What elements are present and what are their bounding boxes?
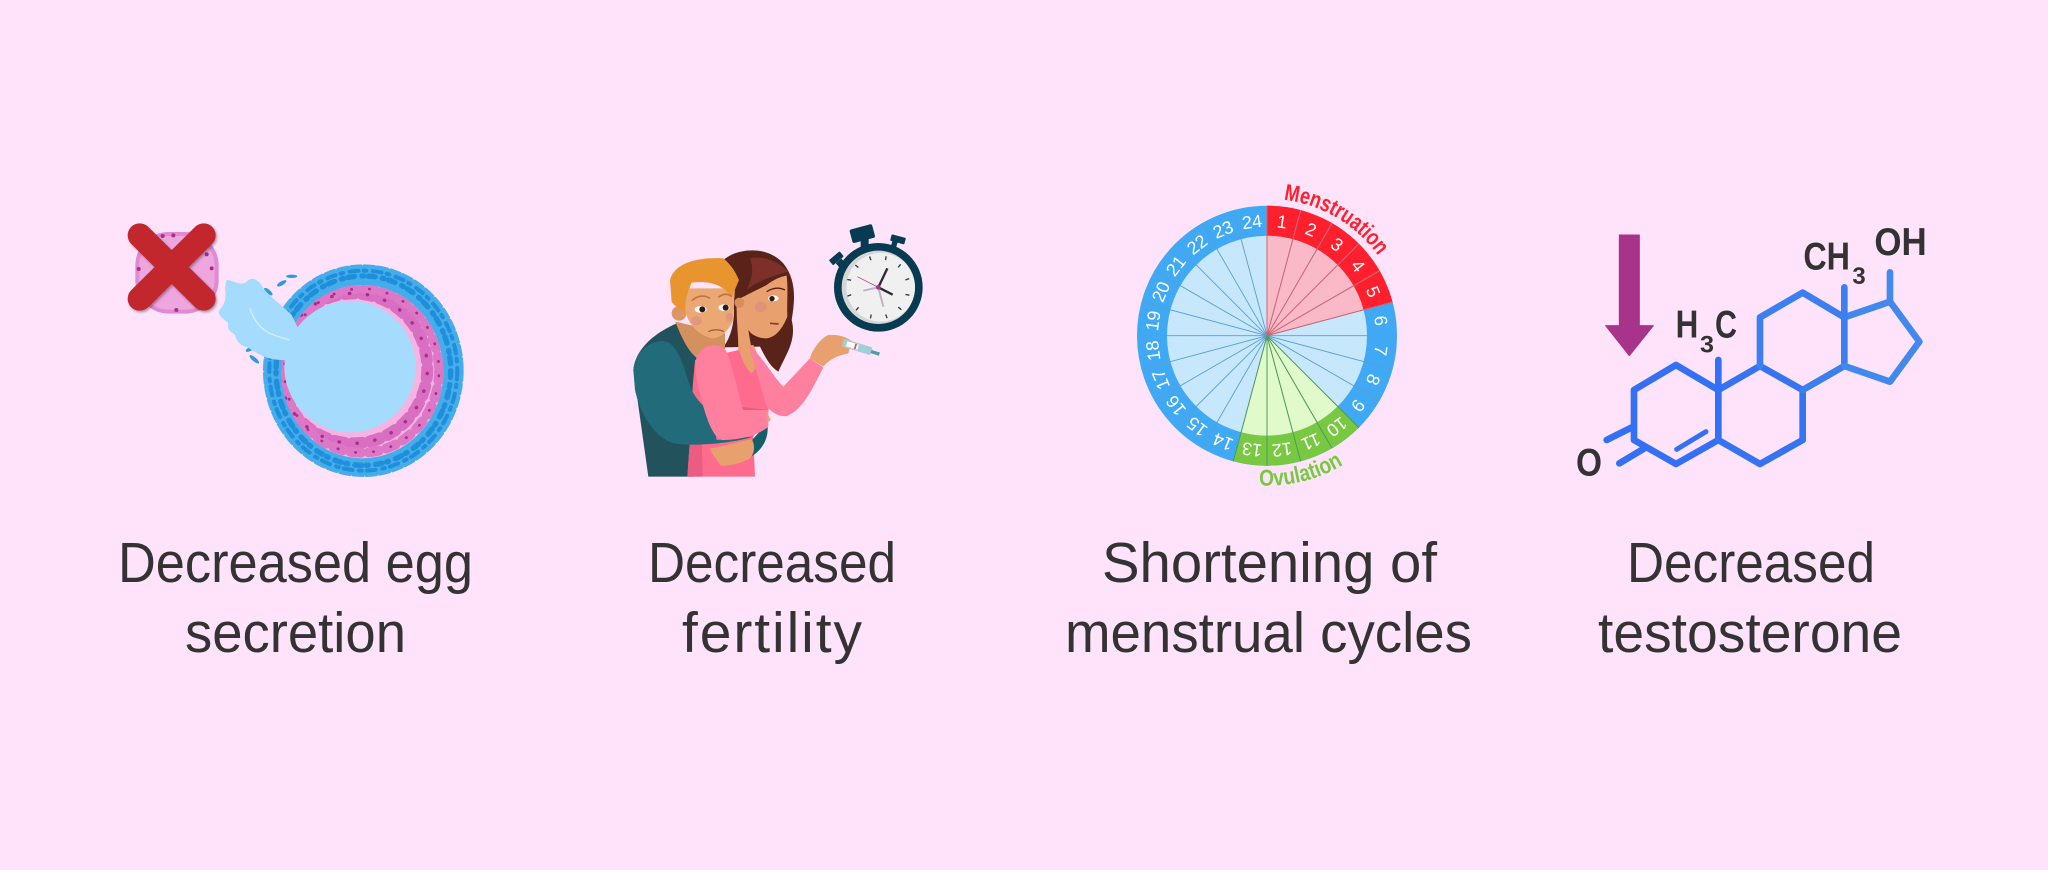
woman dress — [687, 345, 769, 477]
label: menstruation: Menstruation — [1284, 184, 1386, 255]
day numbers: 2 — [1302, 219, 1319, 241]
molecule labels: 3 — [1700, 331, 1714, 358]
day numbers: 3 — [1327, 234, 1347, 256]
molecule labels: OH — [1874, 221, 1927, 264]
molecule labels: 3 — [1852, 263, 1866, 290]
text: decreased fertility: fertility — [682, 601, 862, 665]
text: decreased egg secretion — [118, 531, 473, 665]
molecule bonds — [1607, 272, 1919, 464]
day numbers: 7 — [1370, 344, 1391, 357]
day numbers: 21 — [1162, 252, 1190, 280]
day numbers: 9 — [1347, 395, 1369, 416]
pregnancy test — [842, 339, 881, 358]
hands — [710, 335, 852, 466]
day numbers: 15 — [1183, 413, 1211, 441]
text: decreased testosterone — [1598, 531, 1902, 665]
stopwatch — [829, 224, 923, 332]
day numbers: 10 — [1323, 413, 1351, 441]
woman face and neck — [734, 258, 788, 350]
day numbers: 4 — [1347, 256, 1369, 276]
text: shortening of menstrual cycles: menstrual cycles — [1065, 601, 1472, 665]
molecule labels: O — [1576, 442, 1602, 485]
day numbers: 18 — [1142, 339, 1165, 362]
wheel base — [1167, 236, 1367, 436]
infographic canvas — [122, 184, 1924, 664]
text: shortening of menstrual cycles — [1065, 531, 1472, 665]
text: shortening of menstrual cycles: Shortening of — [1102, 531, 1437, 595]
day numbers: 22 — [1183, 231, 1211, 259]
day numbers: 12 — [1271, 438, 1293, 461]
woman extended arm — [748, 345, 823, 416]
day numbers: 11 — [1298, 429, 1323, 454]
follicle antrum and released fluid — [219, 279, 416, 432]
day numbers: 1 — [1276, 211, 1288, 233]
menstruation segment — [1267, 206, 1393, 336]
icon: worried couple with pregnancy test and stopwatch — [633, 224, 923, 477]
day numbers: 17 — [1148, 367, 1174, 393]
chart: menstrual cycle wheel — [1137, 184, 1397, 486]
day numbers: 13 — [1241, 438, 1263, 461]
day numbers: 24 — [1241, 211, 1263, 233]
woman near sleeve — [696, 345, 768, 440]
label: ovulation: Ovulation — [1260, 456, 1342, 486]
day numbers: 6 — [1370, 314, 1391, 327]
molecule labels: CH — [1803, 235, 1850, 278]
follicle outer blue layer — [245, 266, 462, 475]
text: decreased testosterone: testosterone — [1598, 601, 1902, 665]
text: decreased fertility: Decreased — [648, 531, 896, 595]
icon: ruptured follicle and crossed-out egg — [137, 233, 462, 475]
text: decreased testosterone: Decreased — [1627, 531, 1875, 595]
day numbers: 16 — [1162, 391, 1190, 420]
day numbers: 14 — [1210, 429, 1236, 455]
day numbers: 5 — [1362, 283, 1384, 300]
text: decreased fertility — [648, 531, 896, 665]
day numbers: 19 — [1142, 309, 1165, 332]
man head — [670, 258, 739, 338]
arrow: decrease — [1606, 235, 1653, 356]
man torso — [633, 322, 725, 477]
follicle pink granulosa layer — [279, 285, 443, 458]
day numbers — [1142, 211, 1391, 461]
molecule labels: C — [1715, 303, 1737, 346]
ovulation segment — [1233, 336, 1359, 466]
egg — [137, 233, 217, 312]
molecule labels: H — [1676, 303, 1698, 346]
day numbers: 8 — [1362, 371, 1384, 388]
man arm embracing — [633, 341, 768, 457]
icon: testosterone molecule with down arrow — [1576, 221, 1927, 485]
day numbers: 23 — [1210, 217, 1236, 243]
spokes — [1137, 206, 1397, 466]
icon: red cross — [140, 235, 204, 299]
text: decreased egg secretion: Decreased egg — [118, 531, 473, 595]
day numbers: 20 — [1148, 279, 1174, 305]
text: decreased egg secretion: secretion — [185, 601, 406, 665]
woman hair — [723, 250, 794, 372]
molecule labels — [1576, 221, 1927, 485]
